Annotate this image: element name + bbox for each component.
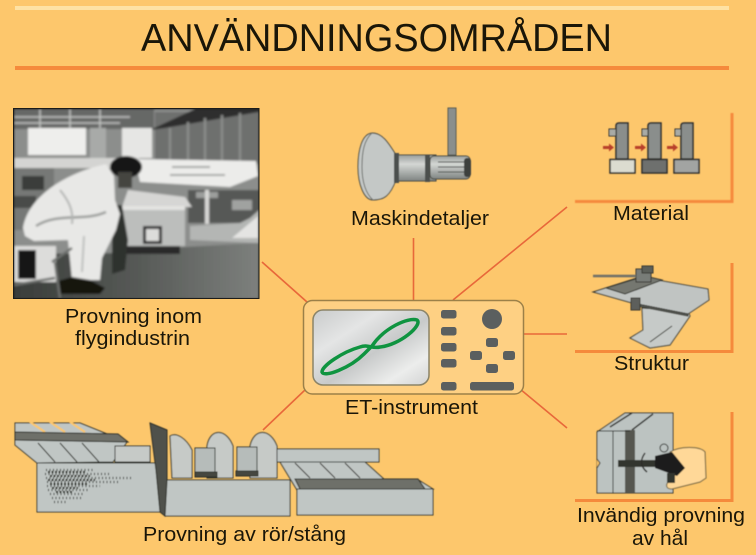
lissajous trace xyxy=(322,320,418,374)
panel: aviation photo xyxy=(13,108,260,299)
block stipple xyxy=(45,470,132,502)
label: Struktur: Struktur xyxy=(614,352,689,375)
left conveyor xyxy=(15,423,127,463)
structure drawing xyxy=(593,266,709,348)
right block xyxy=(297,489,433,515)
label: Provning inom flygindustrin: Provning inom xyxy=(65,305,202,328)
panel: ET instrument xyxy=(304,300,524,394)
panel: structure xyxy=(575,263,732,352)
label: Invändig provning av hål: av hål xyxy=(632,527,688,550)
panel: hole testing xyxy=(575,412,732,500)
material bracket xyxy=(575,113,732,202)
label: Material: Material xyxy=(613,202,689,225)
left block xyxy=(37,463,160,512)
top light rule xyxy=(15,6,729,10)
label: ET-instrument: ET-instrument xyxy=(345,396,478,419)
instrument buttons xyxy=(441,309,515,390)
central block xyxy=(165,480,290,516)
label: Invändig provning av hål xyxy=(577,504,745,550)
title: ANVÄNDNINGSOMRÅDEN xyxy=(141,16,612,60)
label: Maskindetaljer: Maskindetaljer xyxy=(351,207,489,230)
panel: machine part xyxy=(358,108,471,200)
label: Provning inom flygindustrin xyxy=(65,305,202,350)
coil rings xyxy=(170,435,192,478)
hole testing drawing xyxy=(597,413,706,493)
instrument screen xyxy=(313,310,429,385)
label: Invändig provning av hål: Invändig provning xyxy=(577,504,745,527)
instrument casing xyxy=(304,300,524,394)
label: Provning inom flygindustrin: flygindustrin xyxy=(75,327,190,350)
red arrows xyxy=(603,144,678,152)
panel: material xyxy=(575,113,732,202)
hole testing bracket xyxy=(575,412,732,500)
panel: pipe and bar testing machine xyxy=(15,422,433,516)
structure bracket xyxy=(575,263,732,352)
label: Provning av rör/stång: Provning av rör/stång xyxy=(143,523,346,546)
probes on material samples xyxy=(609,123,699,173)
right conveyor xyxy=(277,449,379,462)
connector lines xyxy=(262,207,567,430)
title underline xyxy=(15,66,729,70)
